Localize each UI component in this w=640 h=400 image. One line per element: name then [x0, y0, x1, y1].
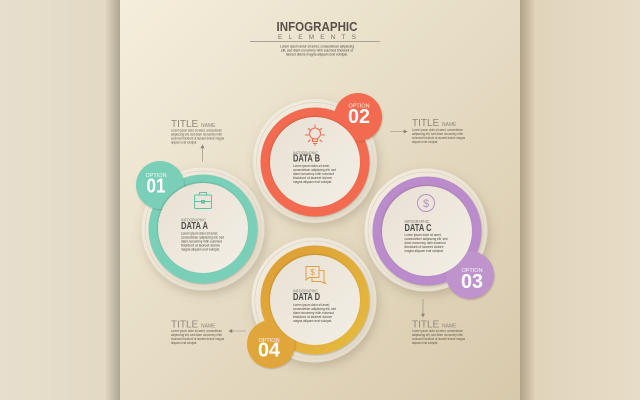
panel: data A — [136, 161, 264, 290]
callout: title C: Lorem ipsum dolor sit amet, consectetuer — [412, 329, 464, 333]
text: data C: consectetuer adipiscing elit, sed — [404, 237, 448, 241]
text: data D: consectetuer adipiscing elit, sed — [293, 307, 336, 311]
icon: dollar coin: $ — [423, 198, 429, 210]
callout: title D: TITLE NAME — [171, 320, 216, 330]
callout: title B: adipiscing elit, sed diam nonummy nibh — [412, 132, 463, 136]
badge: option 01: OPTION — [145, 173, 167, 179]
text: data A — [181, 218, 224, 252]
text: data B: DATA B — [293, 154, 320, 164]
text: data C: INFOGRAPHIC — [404, 219, 430, 224]
badge: option 03: 03 — [461, 271, 483, 293]
callout: title C — [412, 320, 466, 345]
text: data A: magna aliquam erat volutpat. — [181, 248, 220, 252]
ring: teal — [148, 174, 258, 284]
callout: title B: aliquam erat volutpat. — [412, 140, 438, 144]
ring: red — [260, 108, 370, 216]
callout: title D — [171, 320, 225, 345]
callout: title B: Lorem ipsum dolor sit amet, consectetuer — [412, 128, 464, 132]
icon: light bulb — [305, 124, 325, 145]
text: data D: diam nonummy nibh euismod — [293, 311, 334, 315]
text: data D: magna aliquam erat volutpat. — [293, 319, 332, 323]
badge: option 01: 01 — [146, 176, 166, 198]
badge: option 04: OPTION — [258, 338, 280, 344]
panel: data B — [253, 93, 382, 223]
text: data B: INFOGRAPHIC — [293, 150, 319, 156]
text: data B: magna aliquam erat volutpat. — [293, 180, 332, 184]
callout: title B: euismod tincidunt ut laoreet dolore magna — [412, 136, 466, 140]
ring: yellow — [260, 246, 370, 354]
intro text: laoreet dolore magna aliquam erat volutpat. — [286, 52, 348, 56]
badge: option 03: OPTION — [461, 268, 483, 274]
text: data B: Lorem ipsum dolor sit amet, — [293, 164, 330, 168]
text: data C: diam nonummy nibh euismod — [404, 241, 446, 245]
badge: option 02: 02 — [348, 106, 370, 128]
callout: title C: TITLE NAME — [412, 320, 457, 330]
text: data A: DATA A — [181, 221, 208, 232]
text: data B: tincidunt ut laoreet dolore — [293, 176, 332, 180]
panel: data D — [247, 238, 376, 368]
text: data D: tincidunt ut laoreet dolore — [293, 315, 332, 319]
callout: title C: adipiscing elit, sed diam nonummy nibh — [412, 333, 463, 337]
text: data C: DATA C — [404, 223, 432, 234]
arrow: title A — [201, 145, 204, 162]
ring: purple — [372, 176, 482, 286]
arrow: title D — [229, 330, 246, 332]
text: data C: magna aliquam erat volutpat. — [404, 249, 444, 253]
callout: title A: aliquam erat volutpat. — [171, 140, 197, 144]
callout: title A: adipiscing elit, sed diam nonummy nibh — [171, 132, 222, 136]
callout: title C: euismod tincidunt ut laoreet dolore magna — [412, 337, 466, 341]
intro text: elit, sed diam nonummy nibh euismod tincidunt ut — [281, 48, 354, 52]
intro text: Lorem ipsum dolor sit amet, consectetuer adipiscing — [280, 44, 354, 48]
text: data A: tincidunt ut laoreet dolore — [181, 244, 220, 248]
text: data A: consectetuer adipiscing elit, sed — [181, 236, 224, 240]
callout: title A: TITLE NAME — [171, 119, 216, 130]
title: INFOGRAPHIC — [276, 19, 358, 34]
badge: option 04: 04 — [258, 340, 281, 362]
badge: option 03 — [446, 251, 494, 299]
text: data D — [293, 288, 336, 323]
text: data D: INFOGRAPHIC — [293, 288, 319, 294]
callout: title A: euismod tincidunt ut laoreet dolore magna — [171, 136, 225, 140]
arrow: title C — [422, 299, 424, 317]
text: data B: diam nonummy nibh euismod — [293, 172, 334, 176]
icon: chat bubbles: $ — [310, 268, 315, 277]
callout: title D: aliquam erat volutpat. — [171, 341, 197, 345]
icon: briefcase — [194, 192, 212, 208]
text: data A: diam nonummy nibh euismod — [181, 240, 222, 244]
title — [250, 19, 380, 42]
callout: title C: aliquam erat volutpat. — [412, 341, 438, 345]
text: data C: tincidunt ut laoreet dolore — [404, 245, 444, 249]
callout: title A — [171, 119, 225, 144]
panel: data C — [364, 168, 494, 299]
callout: title D: adipiscing elit, sed diam nonummy nibh — [171, 333, 222, 337]
text: data D: DATA D — [293, 292, 320, 303]
callout: title D: Lorem ipsum dolor sit amet, consectetuer — [171, 329, 223, 333]
text: data C — [404, 219, 448, 253]
callout: title B — [412, 118, 466, 144]
text: data A: Lorem ipsum dolor sit amet, — [181, 232, 218, 236]
text: data B: consectetuer adipiscing elit, sed — [293, 168, 336, 172]
text: data D: Lorem ipsum dolor sit amet, — [293, 303, 330, 307]
callout: title D: euismod tincidunt ut laoreet dolore magna — [171, 337, 225, 341]
text: data A: INFOGRAPHIC — [181, 218, 207, 222]
title: ELEMENTS — [278, 34, 357, 41]
callout: title B: TITLE NAME — [412, 118, 457, 129]
intro text — [280, 44, 354, 56]
badge: option 04 — [247, 320, 295, 368]
badge: option 02 — [334, 93, 382, 141]
callout: title A: Lorem ipsum dolor sit amet, consectetuer — [171, 128, 223, 132]
badge: option 01 — [136, 161, 184, 209]
arrow: title B — [390, 130, 407, 133]
text: data C: Lorem ipsum dolor sit amet, — [404, 233, 442, 237]
badge: option 02: OPTION — [348, 104, 370, 110]
text: data B — [293, 150, 336, 184]
